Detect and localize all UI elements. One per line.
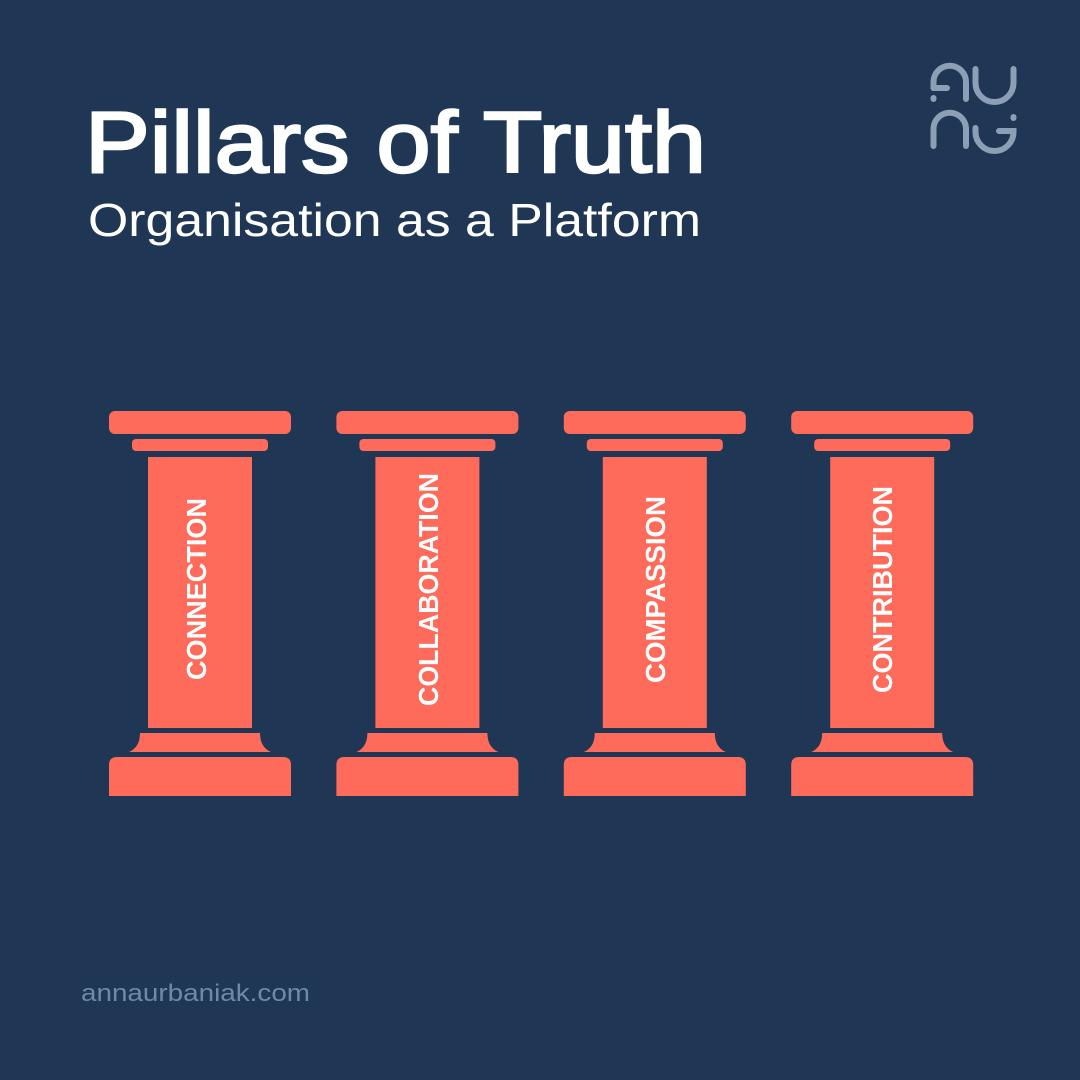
title: Pillars of Truth (85, 95, 706, 191)
label: connection: CONNECTION (181, 498, 212, 680)
subtitle: Organisation as a Platform (88, 194, 701, 246)
icon: AU NG logo (934, 66, 1014, 151)
pillar: connection (109, 411, 291, 796)
label: contribution: CONTRIBUTION (867, 486, 898, 693)
footer website: annaurbaniak.com (81, 980, 310, 1007)
label: compassion: COMPASSION (640, 496, 671, 683)
pillar: collaboration (336, 411, 518, 796)
label: collaboration: COLLABORATION (413, 473, 444, 706)
pillar: compassion (564, 411, 746, 796)
pillar: contribution (791, 411, 973, 796)
